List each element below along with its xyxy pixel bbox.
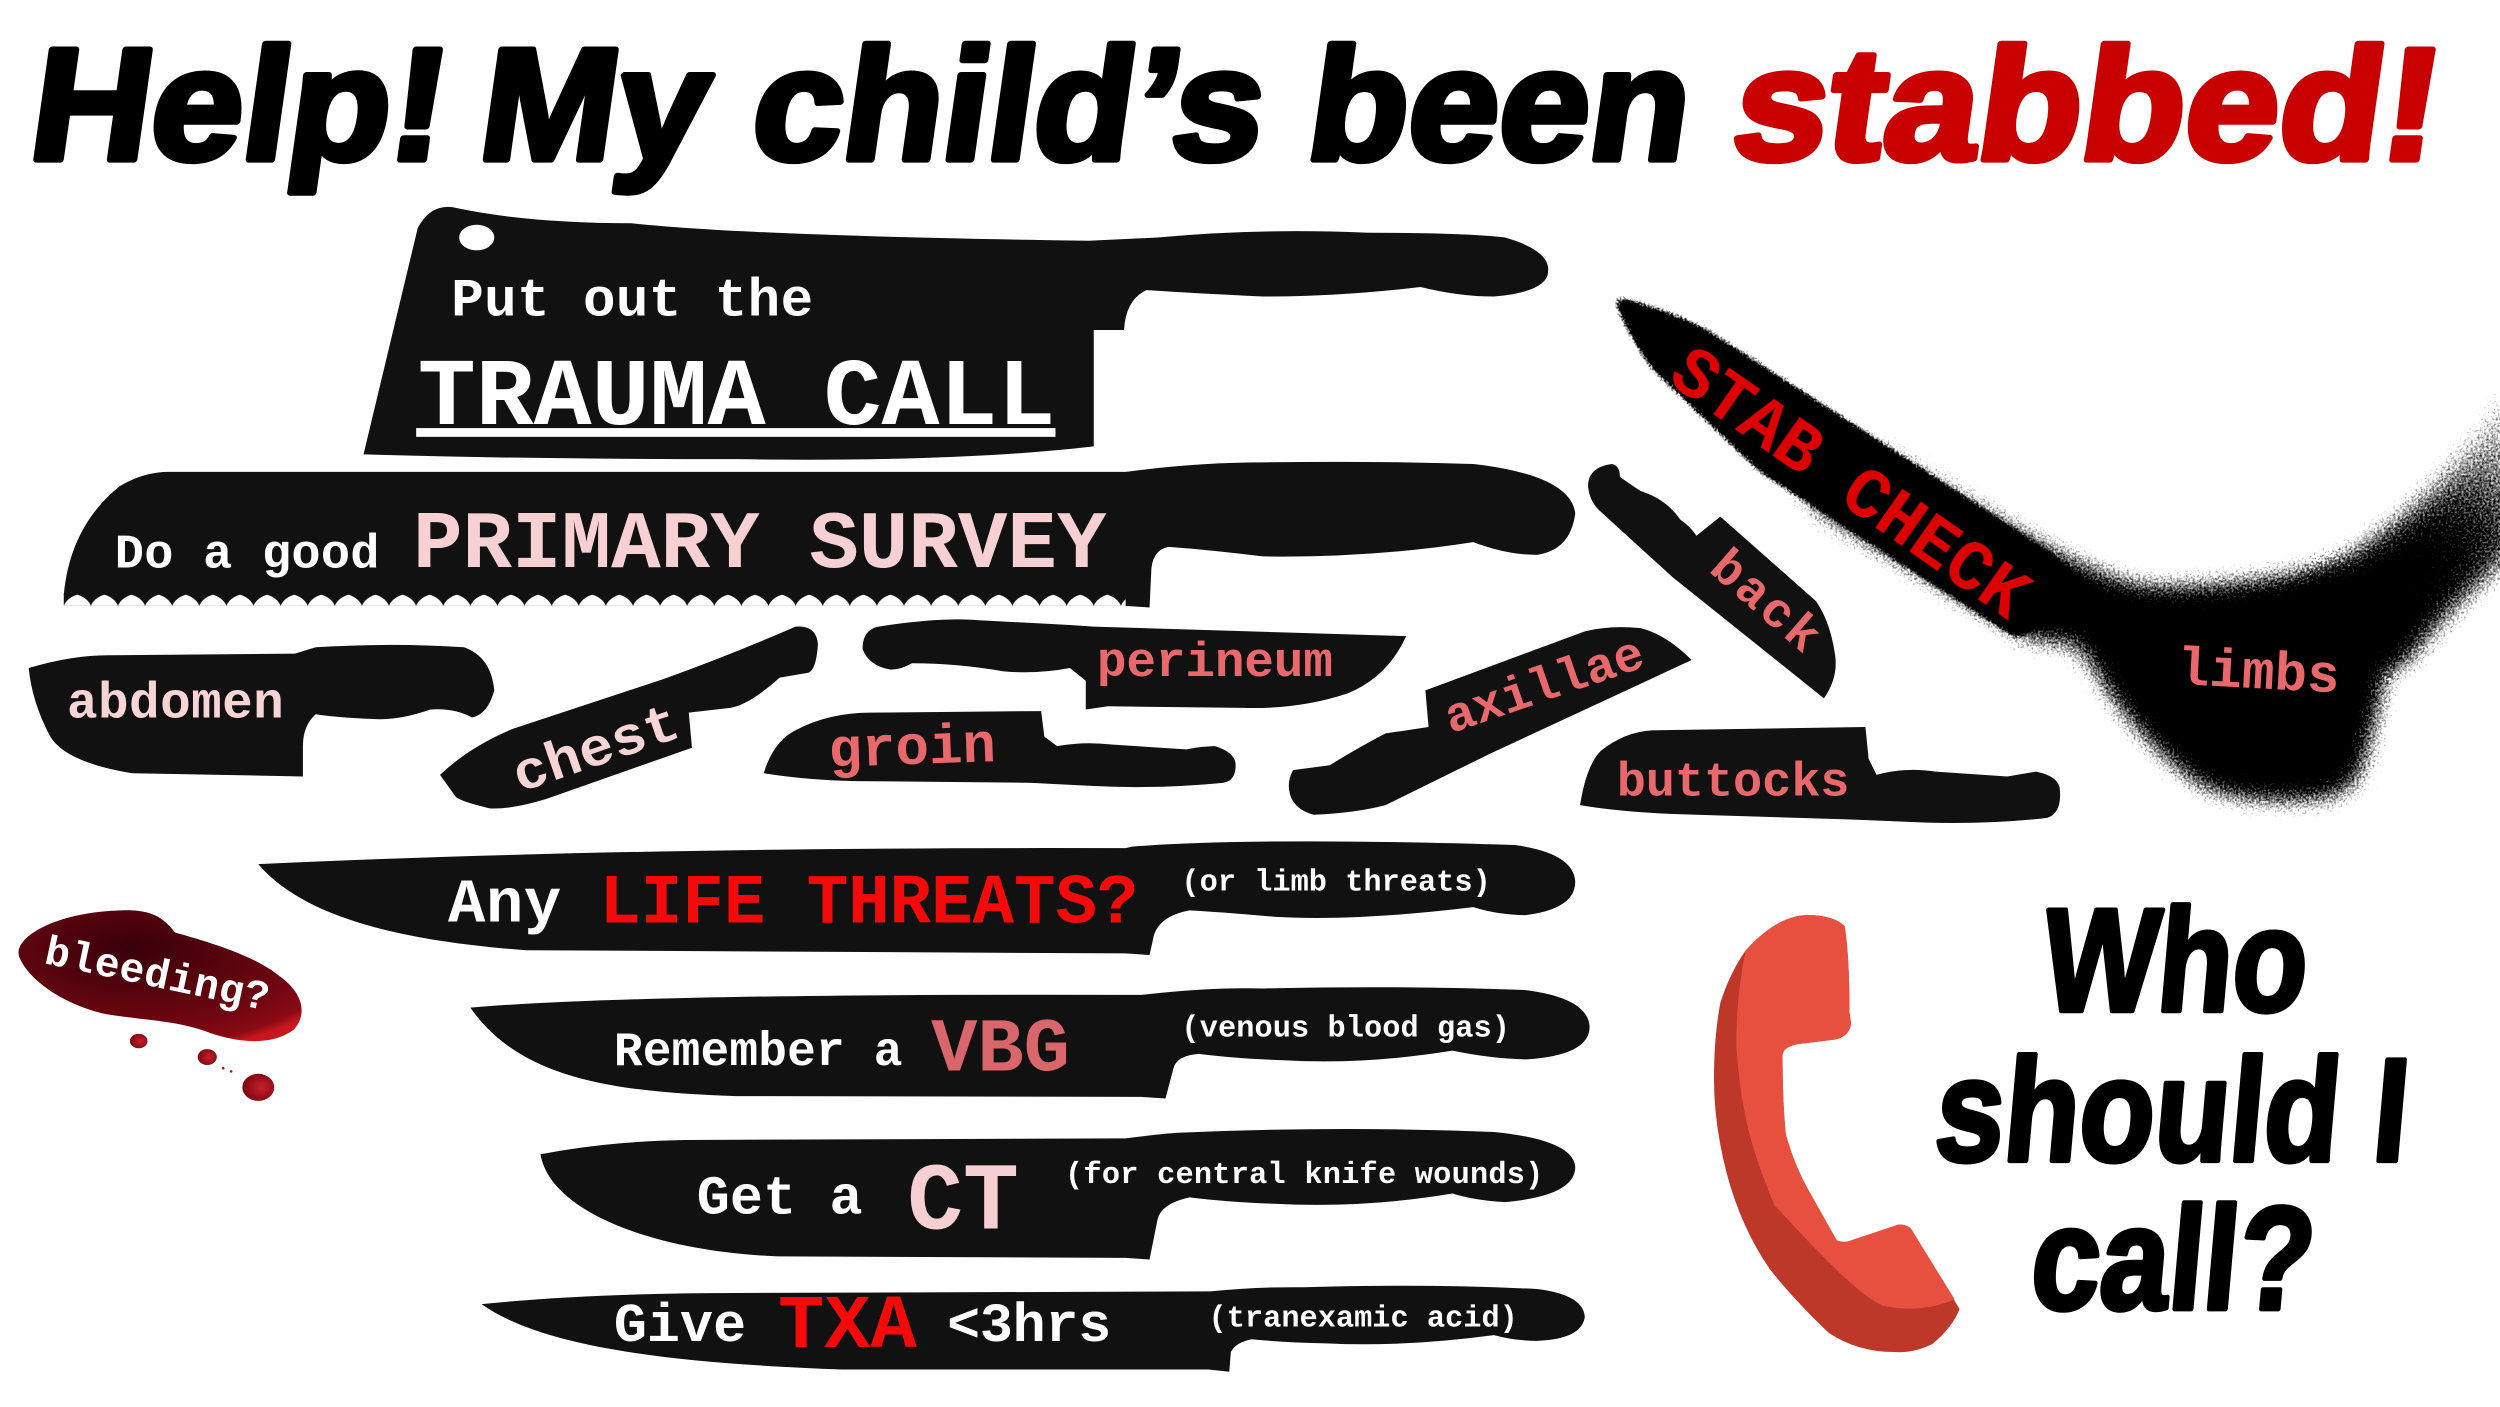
knife: buttocks <box>1580 727 2060 823</box>
serrated knife: primary survey: Do a good <box>115 528 379 583</box>
knife: groin <box>764 711 1236 787</box>
knife: vbg <box>470 987 1590 1098</box>
knife: vbg: Remember a <box>614 1026 902 1080</box>
knife: ct: Get a <box>697 1167 863 1230</box>
knife: txa: (tranexamic acid) <box>1209 1302 1518 1336</box>
knife: groin: groin <box>827 715 997 784</box>
stab check label: STAB CHECK <box>1654 332 2043 639</box>
knife: perineum <box>863 619 1406 709</box>
knife: life threats: LIFE THREATS? <box>599 865 1138 944</box>
blade with rough edge <box>1614 297 2352 743</box>
serrated knife: primary survey: PRIMARY SURVEY <box>413 500 1107 592</box>
knife: chest: chest <box>505 695 688 808</box>
title: stabbed! <box>1724 15 2453 193</box>
knife: axillae: axillae <box>1438 627 1652 748</box>
knife: ct: CT <box>907 1148 1019 1257</box>
knife: txa: <3hrs <box>947 1295 1111 1358</box>
knife: abdomen <box>29 645 494 776</box>
heading: who should I call?: call? <box>2025 1177 2322 1341</box>
knife: back: back <box>1698 540 1831 666</box>
serrated knife: primary survey <box>64 462 1575 607</box>
heading: who should I call? <box>1930 879 2416 1341</box>
knife: axillae <box>1289 627 1692 815</box>
title: My child’s been <box>470 15 1704 193</box>
spray cloud: right arm fading <box>2280 343 2500 678</box>
knife: ct <box>540 1129 1575 1260</box>
knife: vbg: VBG <box>931 1007 1070 1094</box>
cleaver: trauma call <box>364 207 1548 460</box>
limbs label: limbs <box>2175 640 2341 709</box>
spray cloud: limb blot <box>1794 424 2400 802</box>
knife: txa <box>482 1283 1585 1372</box>
cleaver: trauma call: Put out the <box>451 272 813 333</box>
knife: back <box>1588 464 1836 698</box>
knife: txa: TXA <box>778 1283 917 1370</box>
knife: abdomen: abdomen <box>67 676 284 733</box>
icon: red telephone handset <box>1714 915 1960 1352</box>
knife: chest <box>440 626 818 809</box>
knife: buttocks: buttocks <box>1617 756 1849 811</box>
blood drops <box>130 1034 274 1101</box>
heading: who should I call?: should I <box>1930 1029 2416 1193</box>
cleaver: trauma call: TRAUMA CALL <box>418 344 1055 453</box>
heading: who should I call?: Who <box>2036 879 2315 1043</box>
knife: stab check, sprayed away into blot <box>1614 297 2500 802</box>
knife: perineum: perineum <box>1097 635 1333 691</box>
title: Help! <box>21 15 460 193</box>
knife: life threats <box>258 841 1575 955</box>
knife: ct: (for central knife wounds) <box>1065 1159 1543 1193</box>
title <box>21 15 2453 193</box>
blood pool: bleeding? <box>19 910 302 1101</box>
knife: life threats: (or limb threats) <box>1181 866 1491 900</box>
knife: vbg: (venous blood gas) <box>1181 1012 1510 1046</box>
knife: txa: Give <box>614 1295 746 1358</box>
knife: life threats: Any <box>448 870 561 941</box>
blood pool: bleeding?: bleeding? <box>40 930 273 1023</box>
